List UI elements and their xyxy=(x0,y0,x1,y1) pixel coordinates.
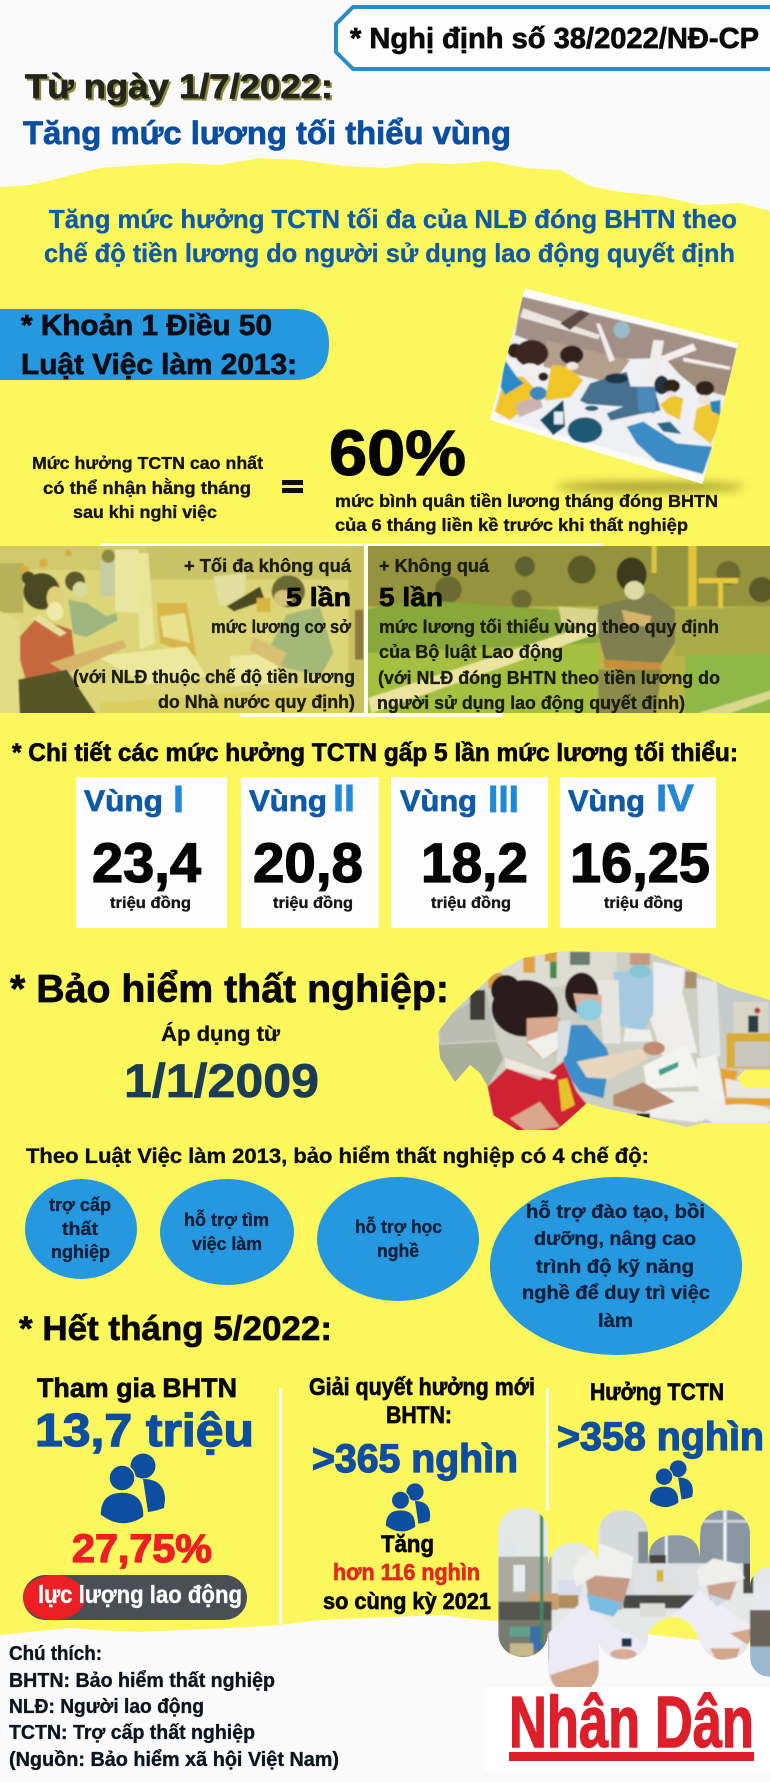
date 1/1/2009: 1/1/2009 xyxy=(124,1054,319,1107)
panel: participants xyxy=(23,1373,254,1620)
card: region I xyxy=(76,777,227,928)
card: region IV: IV xyxy=(656,778,695,820)
icon: people small xyxy=(649,1460,693,1508)
equals sign xyxy=(282,480,303,493)
card: region II: II xyxy=(333,778,355,820)
band text right: của Bộ luật Lao động xyxy=(379,642,563,662)
card: region I: I xyxy=(173,779,184,821)
heading: unemployment insurance: * Bảo hiểm thất nghiệp: xyxy=(10,968,449,1011)
tilted factory photo xyxy=(490,288,738,484)
blob factory photo xyxy=(438,951,770,1130)
formula left text xyxy=(32,453,263,522)
card: region IV: Vùng xyxy=(568,785,645,818)
bubble: job search support: việc làm xyxy=(192,1234,262,1254)
card: region I: Vùng xyxy=(84,785,163,818)
right worker xyxy=(672,1558,751,1660)
text: four regimes heading: Theo Luật Việc làm 2013, bảo hiểm thất nghiệp có 4 chế độ: xyxy=(26,1145,649,1168)
band text right: (với NLĐ đóng BHTN theo tiền lương do xyxy=(378,668,720,688)
card: region III: Vùng xyxy=(400,785,477,818)
panel: new claims: >365 nghìn xyxy=(312,1437,518,1481)
formula explanation xyxy=(335,491,718,535)
panel: new claims: Tăng xyxy=(381,1531,434,1558)
legend: BHTN: Bảo hiểm thất nghiệp xyxy=(9,1670,275,1692)
torn white header paper xyxy=(0,0,770,211)
title: Từ ngày 1/7/2022: xyxy=(25,68,333,106)
panel: receiving allowance: Hưởng TCTN xyxy=(590,1379,724,1406)
hands xyxy=(613,1082,675,1112)
card: region IV: triệu đồng xyxy=(604,895,683,912)
law reference pill: Luật Việc làm 2013: xyxy=(21,349,297,381)
panel: right band photo xyxy=(365,543,770,720)
formula explanation: mức bình quân tiền lương tháng đóng BHTN xyxy=(335,491,718,511)
band text left xyxy=(73,556,355,712)
decree badge xyxy=(336,7,770,69)
band text right: người sử dụng lao động quyết định) xyxy=(377,693,685,713)
bubble: vocational support: hỗ trợ học xyxy=(355,1216,442,1237)
panel: participants: 27,75% xyxy=(72,1527,212,1571)
title: Tăng mức lương tối thiểu vùng xyxy=(23,115,511,151)
bubble: vocational support xyxy=(317,1177,479,1301)
card: region III xyxy=(391,777,548,928)
panel: new claims: hơn 116 nghìn xyxy=(333,1559,480,1585)
card: region IV: 16,25 xyxy=(570,831,710,894)
applied from label: Áp dụng từ xyxy=(161,1023,281,1046)
card: region II: 20,8 xyxy=(253,831,363,894)
band white accents xyxy=(100,543,603,717)
legend: Chú thích: xyxy=(9,1643,102,1665)
card: region I: triệu đồng xyxy=(110,895,191,912)
title xyxy=(23,68,511,151)
formula left text: sau khi nghỉ việc xyxy=(73,502,217,522)
formula left text: có thể nhận hằng tháng xyxy=(43,477,251,498)
panel: receiving allowance xyxy=(557,1379,764,1508)
band text right xyxy=(377,556,720,713)
card: region II: triệu đồng xyxy=(273,895,353,912)
legend: (Nguồn: Bảo hiểm xã hội Việt Nam) xyxy=(9,1749,339,1771)
formula left text: Mức hưởng TCTN cao nhất xyxy=(32,453,263,473)
card: region III: triệu đồng xyxy=(431,895,511,912)
bubble: training support xyxy=(490,1177,742,1355)
bubble: unemployment allowance: nghiệp xyxy=(51,1242,110,1262)
legend: TCTN: Trợ cấp thất nghiệp xyxy=(9,1722,255,1744)
bubble: training support: dưỡng, nâng cao xyxy=(534,1229,696,1250)
third worker xyxy=(613,953,657,1032)
panel: left band photo xyxy=(0,543,373,720)
worker second xyxy=(545,346,583,401)
main worker xyxy=(548,1543,647,1695)
band text right: + Không quá xyxy=(379,556,490,576)
decree badge: * Nghị định số 38/2022/NĐ-CP xyxy=(350,23,759,55)
card: region III: III xyxy=(488,779,519,821)
card: region II xyxy=(241,777,379,928)
white shoes xyxy=(623,995,726,1122)
bubble: training support: nghề để duy trì việc xyxy=(522,1283,710,1304)
bubble: unemployment allowance: thất xyxy=(62,1219,98,1239)
bubble: job search support xyxy=(160,1179,294,1285)
subtitle: Tăng mức hưởng TCTN tối đa của NLĐ đóng BHTN theo xyxy=(49,204,737,234)
worker far left xyxy=(495,340,548,420)
legend xyxy=(9,1643,339,1771)
bubble: job search support: hỗ trợ tìm xyxy=(184,1209,269,1230)
subtitle xyxy=(44,204,737,268)
heading: regional details: * Chi tiết các mức hưởng TCTN gấp 5 lần mức lương tối thiểu: xyxy=(12,739,738,767)
band text right: mức lương tối thiểu vùng theo quy định xyxy=(379,617,719,637)
card: region III: 18,2 xyxy=(421,831,528,894)
bubble: unemployment allowance xyxy=(25,1179,137,1279)
band text left: mức lương cơ sở xyxy=(211,617,351,637)
worker red shirt xyxy=(18,571,127,720)
progress pill: labour force: lực lượng lao động xyxy=(38,1581,242,1609)
bubble: unemployment allowance: trợ cấp xyxy=(49,1195,111,1215)
band text left: do Nhà nước quy định) xyxy=(158,692,355,712)
panel: new claims: Giải quyết hưởng mới xyxy=(309,1374,535,1401)
card: region IV xyxy=(560,777,716,928)
panel: receiving allowance: >358 nghìn xyxy=(557,1415,764,1459)
subtitle: chế độ tiền lương do người sử dụng lao động quyết định xyxy=(44,238,735,268)
icon: people medium xyxy=(385,1483,430,1532)
red shirt worker xyxy=(487,975,587,1132)
icon: people large xyxy=(100,1454,165,1524)
law reference pill xyxy=(0,309,329,381)
formula explanation: của 6 tháng liền kề trước khi thất nghiệp xyxy=(335,515,688,535)
worker teal shirt xyxy=(65,571,117,637)
bubble: training support: hỗ trợ đào tạo, bồi xyxy=(526,1201,705,1223)
column dividers xyxy=(279,1388,549,1624)
panel: participants: Tham gia BHTN xyxy=(37,1373,237,1403)
torn white footer paper xyxy=(0,1615,770,1782)
progress pill: labour force xyxy=(23,1575,247,1620)
heading: end of May 2022: * Hết tháng 5/2022: xyxy=(19,1310,332,1348)
law reference pill: * Khoản 1 Điều 50 xyxy=(21,310,272,342)
panel: new claims: BHTN: xyxy=(386,1402,452,1429)
band text left: 5 lần xyxy=(286,582,351,612)
card: region I: 23,4 xyxy=(92,831,201,894)
bottom factory photo columns xyxy=(498,1508,770,1687)
60 percent: 60% xyxy=(329,417,466,489)
band text left: + Tối đa không quá xyxy=(184,556,352,576)
panel: participants: 13,7 triệu xyxy=(35,1404,254,1456)
workers right xyxy=(654,376,722,444)
gloves pile xyxy=(540,372,712,474)
band text right: 5 lần xyxy=(379,582,443,612)
card: region II: Vùng xyxy=(249,785,327,818)
bubble: training support: làm xyxy=(598,1311,633,1332)
bubble: training support: trình độ kỹ năng xyxy=(536,1257,694,1278)
panel: new claims xyxy=(309,1374,535,1614)
band text left: (với NLĐ thuộc chế độ tiền lương xyxy=(73,667,355,687)
title: Từ ngày 1/7/2022: xyxy=(27,70,335,108)
man xyxy=(598,557,675,720)
legend: NLĐ: Người lao động xyxy=(9,1696,204,1718)
panel: new claims: so cùng kỳ 2021 xyxy=(323,1588,491,1614)
bubble: vocational support: nghề xyxy=(377,1241,419,1261)
photo shadow xyxy=(555,483,745,491)
middle worker xyxy=(563,973,665,1098)
